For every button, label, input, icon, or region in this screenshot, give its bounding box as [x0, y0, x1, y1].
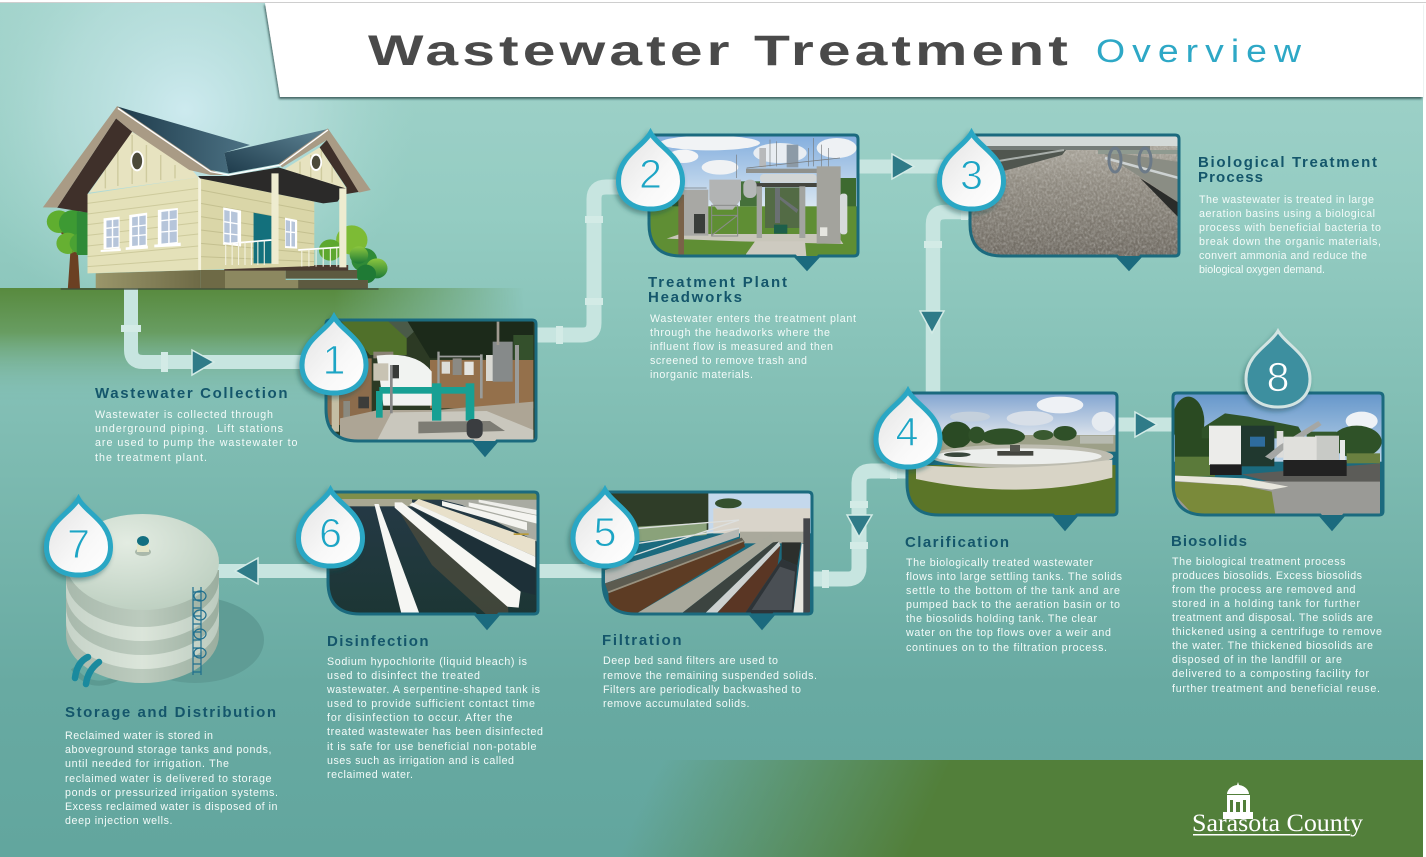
text block: Sodium hypochlorite (liquid bleach) is	[327, 656, 527, 668]
text block: treated wastewater has been disinfected	[327, 726, 543, 738]
droplet 6	[298, 490, 362, 566]
heading: Storage and Distribution	[65, 704, 276, 721]
door	[254, 213, 271, 263]
logo: Sarasota County	[1192, 782, 1364, 837]
panel: biosolids trucks photo	[1165, 385, 1390, 529]
droplet 8	[1246, 331, 1310, 407]
step 7: storage and distribution	[46, 499, 278, 827]
arrow: biological to clarification	[920, 311, 944, 333]
text block: from the process are removed and	[1172, 584, 1356, 596]
heading: Disinfection	[327, 633, 428, 650]
text block: Wastewater is collected through	[95, 409, 273, 421]
text block: inorganic materials.	[650, 369, 753, 381]
text block: remove accumulated solids.	[603, 698, 750, 710]
heading: Headworks	[648, 289, 742, 306]
text block: convert ammonia and reduce the	[1199, 250, 1367, 262]
ladder	[193, 587, 206, 675]
text block: Excess reclaimed water is disposed of in	[65, 801, 278, 813]
text block: influent flow is measured and then	[650, 341, 833, 353]
columns and railing	[223, 173, 346, 267]
droplet 7: 7	[67, 521, 90, 567]
house illustration	[43, 106, 387, 289]
droplet 1: 1	[323, 337, 345, 383]
droplet 4	[876, 391, 940, 467]
text block: biological oxygen demand.	[1199, 264, 1325, 276]
text block: used to provide sufficient contact time	[327, 698, 535, 710]
panel: aeration basin photo	[970, 135, 1179, 269]
tree right	[319, 225, 387, 283]
droplet 1	[302, 317, 366, 393]
text block: wastewater. A serpentine-shaped tank is	[326, 684, 540, 696]
text block: uses such as irrigation and is called	[327, 755, 514, 767]
droplet 4: 4	[896, 409, 918, 455]
discharge pipes	[75, 657, 99, 684]
icon: storage tank	[66, 514, 264, 684]
heading: Wastewater Collection	[95, 385, 288, 402]
step 3: biological treatment process	[940, 133, 1381, 276]
text block: settle to the bottom of the tank and are	[906, 585, 1120, 597]
text block	[1172, 556, 1382, 695]
text block: stored in a holding tank for further	[1172, 598, 1360, 610]
title banner	[265, 3, 1423, 97]
droplet 3: 3	[960, 152, 983, 198]
text block: the water. The thickened biosolids are	[1172, 640, 1373, 652]
panel: headworks photo	[640, 128, 865, 269]
droplet 3	[940, 133, 1004, 209]
heading: Biosolids	[1171, 533, 1247, 550]
text block: reclaimed water is delivered to storage	[65, 773, 272, 785]
windows	[101, 207, 297, 252]
text block: Filters are periodically backwashed to	[603, 684, 801, 696]
text block: The biological treatment process	[1172, 556, 1346, 568]
heading: Process	[1198, 169, 1263, 186]
text block	[95, 409, 298, 464]
text block: the treatment plant.	[95, 452, 207, 464]
text block: used to disinfect the treated	[327, 670, 480, 682]
text block	[326, 656, 543, 781]
text block: Deep bed sand filters are used to	[603, 655, 778, 667]
text block: produces biosolids. Excess biosolids	[1172, 570, 1362, 582]
text block: remove the remaining suspended solids.	[603, 670, 817, 682]
text block: The wastewater is treated in large	[1199, 194, 1374, 206]
step 2: treatment plant headworks	[618, 128, 865, 381]
droplet 2	[618, 133, 682, 209]
text block	[1199, 194, 1381, 276]
text block	[65, 730, 278, 827]
panel: sand filter photo	[595, 485, 820, 628]
heading: Filtration	[602, 632, 682, 649]
text block: through the headworks where the	[650, 327, 830, 339]
text block: deep injection wells.	[65, 815, 172, 827]
text block: ponds or pressurized irrigation systems.	[65, 787, 278, 799]
droplet 5: 5	[594, 509, 616, 555]
text block: for disinfection to occur. After the	[327, 712, 513, 724]
icon: courthouse	[1223, 782, 1253, 819]
step 6: disinfection	[298, 485, 547, 781]
text block: water on the top flows over a weir and	[905, 627, 1111, 639]
arrow: collection	[192, 350, 214, 375]
tree left	[47, 210, 91, 288]
pipes and flow arrows	[121, 154, 1175, 588]
text block: thickened using a centrifuge to remove	[1172, 626, 1382, 638]
heading	[1198, 154, 1377, 186]
text block: aeration basins using a biological	[1199, 208, 1375, 220]
arrow: disinfection to storage	[235, 558, 258, 584]
text block: it is safe for use beneficial non-potable	[327, 741, 537, 753]
text block: Wastewater enters the treatment plant	[650, 313, 856, 325]
text block: screened to remove trash and	[650, 355, 807, 367]
text block: aboveground storage tanks and ponds,	[65, 744, 272, 756]
text block: underground piping. Lift stations	[95, 423, 283, 435]
text block: reclaimed water.	[327, 769, 413, 781]
step 5: filtration	[573, 485, 820, 710]
text block: disposed of in the landfill or are	[1172, 654, 1342, 666]
panel: chlorine contact tank photo	[322, 485, 547, 628]
heading: Treatment Plant	[648, 274, 787, 291]
arrow: headworks to biological	[892, 154, 914, 179]
step 4: clarification	[876, 385, 1125, 654]
droplet 6: 6	[319, 510, 342, 556]
text block: flows into large settling tanks. The solids	[906, 571, 1122, 583]
arrow: filtration up to clarification	[847, 515, 872, 537]
text block: break down the organic materials,	[1199, 236, 1381, 248]
heading: Biological Treatment	[1198, 154, 1377, 171]
text block: are used to pump the wastewater to	[95, 437, 298, 449]
panel: clarifier photo	[900, 385, 1125, 529]
text block: until needed for irrigation. The	[65, 758, 229, 770]
step 1: wastewater collection	[95, 315, 545, 464]
text block: the biosolids holding tank. The clear	[906, 613, 1097, 625]
tank cap	[135, 536, 151, 556]
panel: collection photo	[320, 315, 545, 455]
county name: Sarasota County	[1192, 810, 1364, 837]
heading	[648, 274, 787, 306]
text block: treatment and disposal. The solids are	[1172, 612, 1373, 624]
text block: further treatment and beneficial reuse.	[1172, 683, 1380, 695]
text block: The biologically treated wastewater	[906, 557, 1093, 569]
text block: process with beneficial bacteria to	[1199, 222, 1381, 234]
text block	[650, 313, 856, 381]
text block: Reclaimed water is stored in	[65, 730, 213, 742]
droplet 7	[46, 499, 110, 575]
text block: delivered to a composting facility for	[1172, 668, 1369, 680]
title: Wastewater Treatment	[368, 27, 1072, 75]
heading: Clarification	[905, 534, 1009, 551]
droplet 8: 8	[1267, 354, 1289, 400]
droplet 5	[573, 490, 637, 566]
text block	[905, 557, 1122, 654]
round windows	[130, 151, 144, 171]
arrow: clarification to biosolids	[1135, 412, 1157, 437]
step 8: biosolids	[1165, 331, 1390, 695]
text block: continues on to the filtration process.	[906, 642, 1107, 654]
text block	[603, 655, 817, 710]
text block: pumped back to the aeration basin or to	[906, 599, 1120, 611]
droplet 2: 2	[639, 151, 662, 197]
subtitle: Overview	[1096, 33, 1308, 69]
